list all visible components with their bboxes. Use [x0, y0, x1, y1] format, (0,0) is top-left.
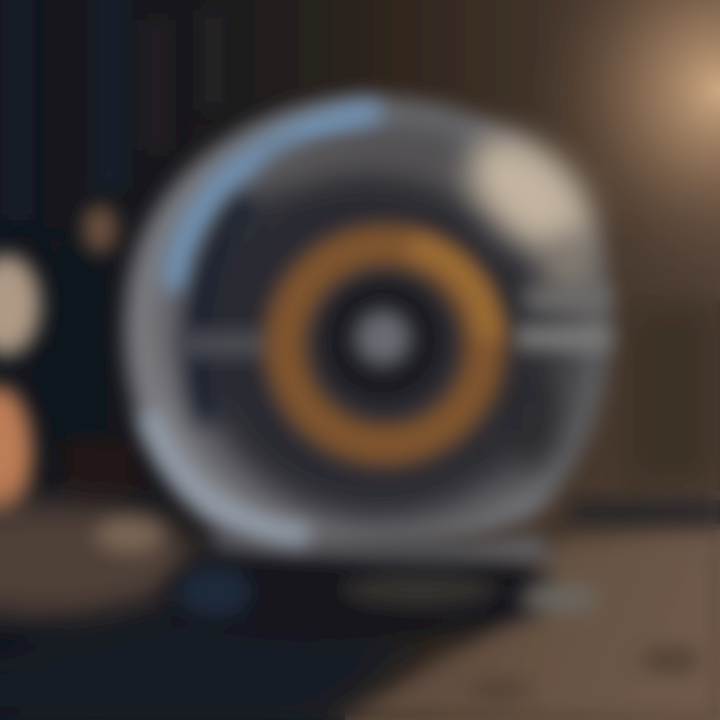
right band upper	[525, 288, 610, 310]
dark lower left	[0, 610, 420, 720]
dark ring	[325, 282, 441, 398]
small orange orb	[83, 205, 117, 253]
cream highlight	[447, 114, 613, 276]
table surface	[0, 500, 720, 720]
lower rim highlight	[150, 420, 300, 535]
left background objects	[0, 205, 117, 518]
orange blob	[0, 386, 32, 518]
blue rim highlight	[175, 112, 370, 280]
inner dark disc	[200, 165, 550, 515]
right band lower	[515, 326, 610, 350]
lower right shadow	[500, 370, 560, 470]
right shoulder tone	[544, 230, 596, 300]
orange ring top right highlight	[410, 245, 490, 340]
left horizontal band	[180, 332, 270, 356]
center	[355, 310, 411, 366]
sphere body	[126, 98, 610, 545]
glass sphere	[126, 98, 613, 545]
table right	[330, 530, 720, 720]
sphere base	[165, 528, 600, 640]
left inner band	[199, 200, 250, 420]
cream blob	[0, 255, 40, 355]
table left	[0, 502, 195, 618]
orange ring	[285, 245, 485, 445]
top inner band	[270, 155, 490, 195]
dark vertical streaks at left	[5, 0, 221, 495]
